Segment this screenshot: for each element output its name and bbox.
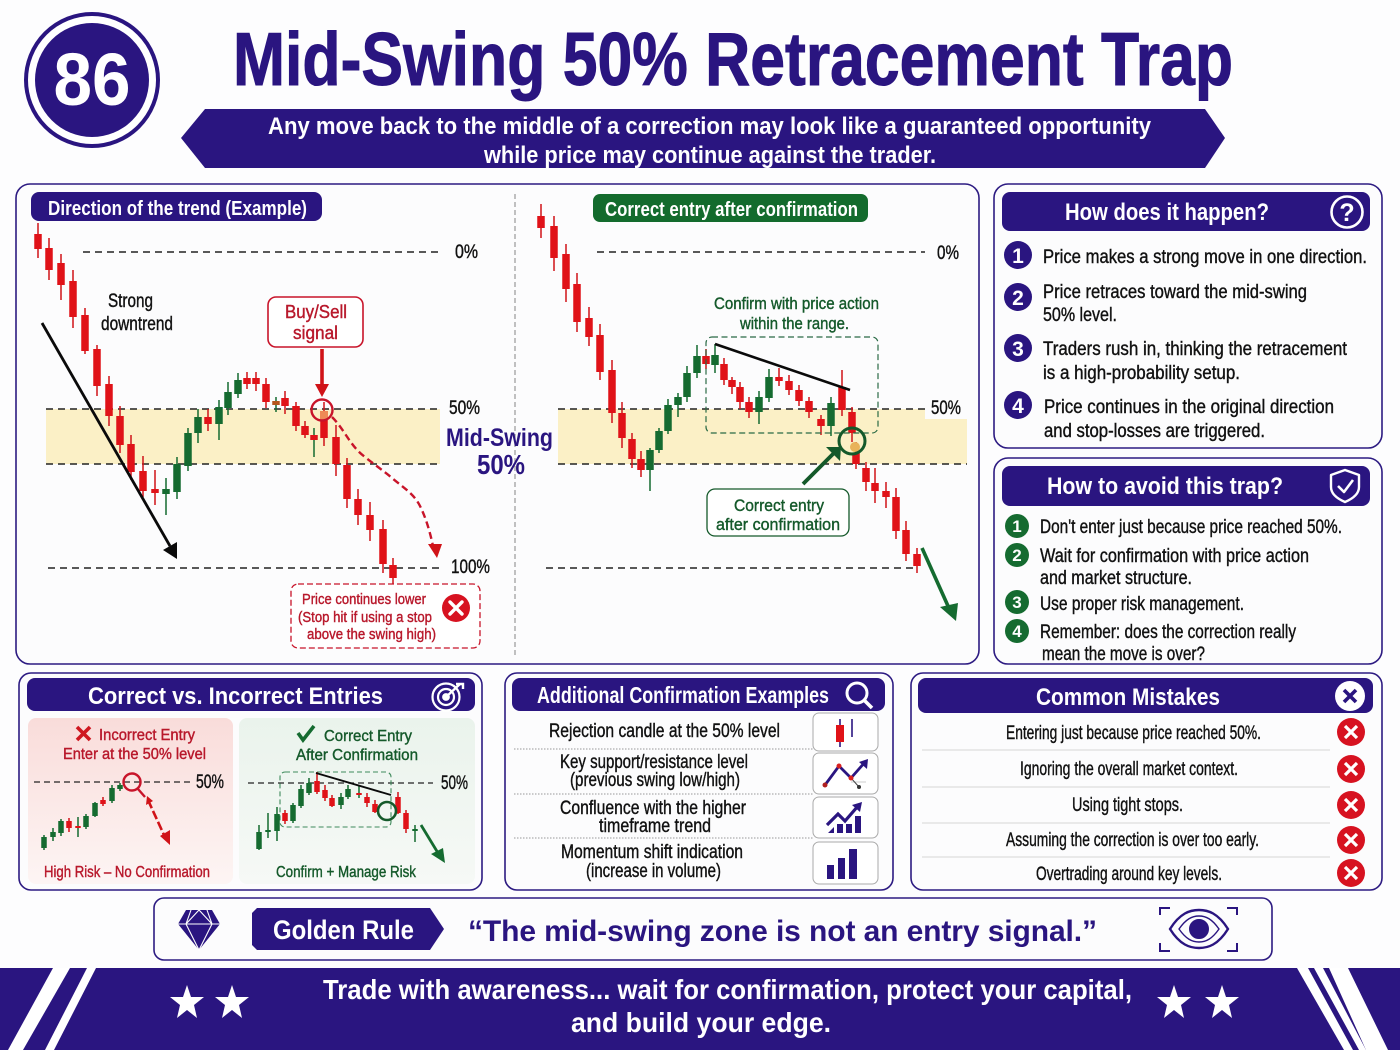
arrow: downtrend [42, 323, 177, 559]
step 4 [1004, 391, 1334, 442]
footer band [0, 968, 1400, 1050]
sub-panel: correct entry: 50% [441, 773, 468, 794]
arrow: signal [315, 349, 329, 397]
tip 3 [1005, 590, 1244, 615]
mid-swing band right [558, 409, 967, 464]
sub-panel: correct entry [239, 718, 475, 884]
footer text: Trade with awareness... wait for confirmation, protect your capital, [323, 974, 1132, 1005]
row: support resistance: (previous swing low/high) [570, 770, 740, 791]
step 3 [1004, 334, 1348, 384]
step 4: 4 [1012, 395, 1024, 418]
confirm text: Confirm with price action [714, 294, 879, 313]
step 3: 3 [1012, 338, 1024, 361]
row: support resistance [560, 752, 878, 794]
callout: correct entry [707, 489, 849, 536]
panel: additional confirmation examples [505, 673, 893, 890]
confirm text [714, 294, 879, 333]
tip 2: 2 [1012, 546, 1022, 565]
step 2: 50% level. [1043, 305, 1117, 326]
row: confluence: timeframe trend [599, 816, 711, 837]
row: momentum [561, 842, 878, 884]
left fibonacci levels: 100% [451, 557, 490, 578]
panel: common mistakes [911, 673, 1382, 890]
annotation: strong downtrend: Strong [108, 291, 153, 312]
step 3: Traders rush in, thinking the retracement [1043, 339, 1348, 360]
heading [27, 678, 475, 711]
callout: price continues lower: above the swing high) [307, 626, 436, 643]
subtitle banner: while price may continue against the trader. [483, 142, 936, 169]
step 3: is a high-probability setup. [1043, 363, 1240, 384]
step 4: Price continues in the original direction [1044, 397, 1334, 418]
signal circle [312, 400, 332, 420]
right chart label: Correct entry after confirmation [605, 199, 858, 221]
sub-panel: correct entry: After Confirmation [296, 747, 418, 764]
heading: Additional Confirmation Examples [537, 682, 829, 708]
mistake 5 [1036, 859, 1365, 887]
tip 2: and market structure. [1040, 568, 1192, 589]
callout: price continues lower: Price continues lower [302, 591, 426, 608]
entry circle [839, 428, 865, 454]
icon: magnifier [847, 683, 872, 708]
row: confluence [560, 797, 878, 838]
label: mid-swing 50% [446, 424, 553, 480]
sub-panel: incorrect entry: Incorrect Entry [99, 727, 195, 744]
sub-panel: incorrect entry: 50% [196, 772, 224, 793]
callout: price continues lower: (Stop hit if using a stop [298, 609, 432, 626]
left fibonacci levels: 0% [455, 242, 478, 263]
callout: price continues lower [291, 584, 480, 648]
label: mid-swing 50%: Mid-Swing [446, 424, 553, 452]
label: mid-swing 50%: 50% [477, 449, 525, 480]
panel: how to avoid this trap [994, 458, 1382, 665]
subtitle banner: Any move back to the middle of a correction may look like a guaranteed opportunity [268, 113, 1151, 140]
tip 1 [1005, 514, 1342, 538]
step 2: Price retraces toward the mid-swing [1043, 282, 1307, 303]
golden rule quote: “The mid-swing zone is not an entry signal.” [468, 915, 1097, 948]
heading [918, 678, 1373, 713]
heading [1002, 192, 1370, 231]
right fibonacci levels: 50% [931, 398, 961, 419]
annotation: strong downtrend [101, 291, 173, 335]
heading: Common Mistakes [1036, 684, 1220, 711]
left fibonacci levels: 50% [449, 398, 480, 419]
callout: correct entry: Correct entry [734, 496, 824, 515]
row: momentum: (increase in volume) [586, 861, 721, 882]
row: support resistance: Key support/resistance level [560, 752, 748, 773]
step 4: and stop-losses are triggered. [1044, 421, 1265, 442]
panel: how does it happen [994, 184, 1382, 448]
mistake 1: Entering just because price reached 50%. [1006, 723, 1261, 744]
tip 2: Wait for confirmation with price action [1040, 546, 1309, 567]
row: momentum: Momentum shift indication [561, 842, 743, 863]
heading [512, 678, 885, 711]
sub-panel: correct entry: Correct Entry [324, 728, 412, 745]
heading: Correct vs. Incorrect Entries [88, 683, 383, 710]
title: Mid-Swing 50% Retracement Trap [233, 17, 1233, 101]
right chart label [593, 194, 868, 222]
confirm text: within the range. [739, 314, 849, 333]
heading [1002, 466, 1370, 506]
tip 3: 3 [1012, 593, 1022, 612]
step 1 [1004, 241, 1367, 269]
panel: correct vs incorrect entries [19, 673, 482, 890]
heading: How does it happen? [1065, 199, 1269, 226]
icon: diamond [178, 910, 220, 950]
number badge [26, 14, 158, 146]
mistake 4: Assuming the correction is over too early. [1006, 830, 1259, 851]
step 2 [1004, 282, 1307, 326]
arrow: green continuation [922, 548, 958, 621]
icon: eye [1160, 908, 1237, 951]
heading: How to avoid this trap? [1047, 473, 1283, 500]
tip 2 [1005, 543, 1309, 589]
golden rule tag: Golden Rule [273, 915, 414, 945]
tip 1: 1 [1012, 517, 1022, 536]
right fibonacci levels [546, 243, 969, 568]
left chart label [31, 192, 322, 221]
number badge: 86 [54, 38, 130, 121]
tip 4: Remember: does the correction really [1040, 622, 1296, 643]
annotation: strong downtrend: downtrend [101, 314, 173, 335]
golden rule tag [252, 908, 444, 950]
icon: question [1332, 196, 1362, 228]
sub-panel: correct entry: Confirm + Manage Risk [276, 864, 416, 881]
tip 4: mean the move is over? [1042, 644, 1205, 665]
icon: target [432, 684, 463, 710]
footer text: and build your edge. [571, 1007, 831, 1038]
callout: correct entry: after confirmation [716, 515, 840, 534]
footer text [323, 974, 1132, 1038]
confirmation range box [706, 337, 878, 433]
dashed projected path [332, 417, 442, 558]
left fibonacci levels [46, 242, 490, 578]
sub-panel: incorrect entry [28, 718, 233, 884]
left chart label: Direction of the trend (Example) [48, 198, 307, 220]
mistake 2 [1020, 755, 1365, 783]
mid-swing band left [46, 409, 440, 464]
row: rejection candle: Rejection candle at the 50% level [549, 721, 780, 742]
mistake 3: Using tight stops. [1072, 795, 1183, 816]
icon: header x [1335, 681, 1365, 711]
sub-panel: incorrect entry: High Risk – No Confirmation [44, 864, 210, 881]
subtitle banner [181, 109, 1225, 169]
mistake 2: Ignoring the overall market context. [1020, 759, 1238, 780]
panel: golden rule [154, 898, 1272, 960]
tip 4 [1005, 619, 1296, 665]
step 2: 2 [1012, 287, 1024, 310]
mistake 5: Overtrading around key levels. [1036, 864, 1222, 885]
row: confluence: Confluence with the higher [560, 798, 747, 819]
tip 4: 4 [1012, 622, 1022, 641]
trendline [715, 344, 850, 390]
callout: buy/sell signal: signal [293, 323, 338, 343]
icon: stars [170, 985, 1239, 1018]
icon: shield [1331, 470, 1359, 502]
mistake 3 [1072, 791, 1365, 819]
sub-panel: incorrect entry: Enter at the 50% level [63, 746, 206, 763]
callout: buy/sell signal [268, 297, 363, 347]
right candlestick chart [541, 204, 917, 573]
arrow: to entry [803, 447, 841, 484]
callout: buy/sell signal: Buy/Sell [285, 302, 347, 322]
icon: question: ? [1339, 199, 1355, 227]
step 1: 1 [1012, 245, 1024, 268]
row: rejection candle [549, 713, 878, 751]
left candlestick chart [38, 223, 393, 587]
tip 3: Use proper risk management. [1040, 594, 1244, 615]
panel: chart examples [16, 184, 979, 664]
right fibonacci levels: 0% [937, 243, 959, 264]
